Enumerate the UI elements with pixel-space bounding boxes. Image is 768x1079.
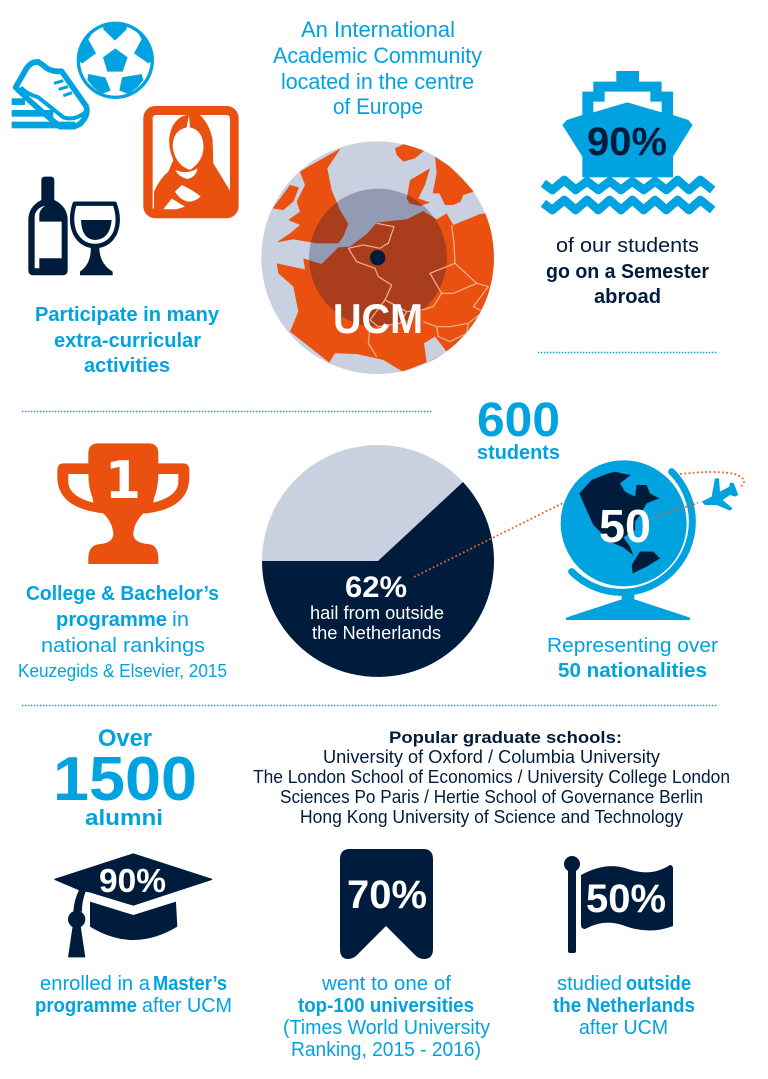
text: nationalities [547,635,718,682]
text: national rankings: Keuzegids & Elsevier, 2015 [18,661,227,681]
text: extra-curricular activities [35,304,220,377]
heading: international community [273,17,482,119]
icon: running shoe [12,62,87,128]
stat: over 1500 alumni [53,725,197,830]
icon: soccer ball [77,22,154,99]
heading: international community: located in the centre [281,69,474,94]
text: semester abroad: go on a Semester [546,261,709,283]
icon: bookmark with 70%: 70% [347,873,427,917]
text: studied outside the Netherlands: after UCM [579,1017,668,1039]
text: nationalities: Representing over [547,635,718,657]
chart: pie 62% from outside the Netherlands: 62% [345,571,407,604]
text: national rankings: College & Bachelor’s [26,583,219,605]
map: Europe globe with UCM [261,141,503,383]
text: top-100 universities: went to one of [321,973,451,995]
icon: flag with 50%: 50% [586,877,666,921]
stat: over 1500 alumni: Over [98,725,152,752]
text: national rankings [18,583,227,681]
icon: globe with 50 [561,460,692,620]
icon: bookmark with 70% [340,849,433,959]
arrow: dotted flight path [414,472,744,577]
text: top-100 universities: top-100 universities [298,995,474,1017]
icon: trophy with 1: 1 [105,451,141,511]
text: master's programme [35,973,232,1017]
stat: over 1500 alumni: alumni [85,805,163,830]
text: popular graduate schools: The London School of Economics / University College London [253,767,730,787]
icon: cruise ship with 90% [543,71,713,210]
text: extra-curricular activities: extra-curricular [54,330,201,352]
text: semester abroad: of our students [556,235,699,257]
stat: over 1500 alumni: 1500 [53,745,197,814]
icon: painting portrait [143,106,239,218]
text: studied outside the Netherlands: the Netherlands [553,995,695,1017]
text: studied outside the Netherlands: studied [557,973,622,995]
text: master's programme: programme [35,995,137,1017]
text: top-100 universities: (Times World University [283,1017,490,1039]
text: national rankings: programme [56,609,167,631]
icon: graduation cap with 90%: 90% [99,862,166,899]
stat: 600 students: 600 [477,394,560,447]
text: extra-curricular activities: Participate in many [35,304,220,326]
text: popular graduate schools: Popular graduate schools: [389,728,622,747]
icon: trophy with 1 [57,443,189,564]
text: extra-curricular activities: activities [84,355,170,377]
map: Europe globe with UCM: UCM [333,295,423,342]
icon: cruise ship with 90%: 90% [587,120,667,164]
heading: international community: Academic Community [273,43,482,68]
heading: international community: An International [301,17,455,42]
chart: pie 62% from outside the Netherlands [262,445,494,677]
text: master's programme: Master’s [153,973,227,995]
icon: globe with 50: 50 [599,500,651,552]
text: semester abroad [546,235,709,308]
text: popular graduate schools [253,728,730,827]
heading: international community: of Europe [333,94,423,119]
text: popular graduate schools: Sciences Po Paris / Hertie School of Governance Berlin [280,787,703,807]
text: national rankings: national rankings [41,635,205,657]
text: studied outside the Netherlands [553,973,695,1039]
text: national rankings: in [172,609,189,631]
icon: airplane [702,478,738,511]
text: master's programme: enrolled in a [40,973,151,995]
chart: pie 62% from outside the Netherlands: hail from outside [310,603,444,623]
text: popular graduate schools: Hong Kong University of Science and Technology [300,807,683,827]
icon: wine bottle and glass [28,177,118,275]
text: nationalities: 50 nationalities [558,660,707,682]
text: top-100 universities [283,973,490,1061]
text: studied outside the Netherlands: outside [626,973,691,995]
chart: pie 62% from outside the Netherlands: the Netherlands [312,623,441,643]
icon: graduation cap with 90% [55,854,212,957]
text: top-100 universities: Ranking, 2015 - 2016) [291,1039,481,1061]
text: master's programme: after UCM [142,995,232,1017]
stat: 600 students: students [477,442,560,464]
text: popular graduate schools: University of Oxford / Columbia University [323,747,660,767]
icon: flag with 50% [564,856,673,953]
text: semester abroad: abroad [594,286,661,308]
